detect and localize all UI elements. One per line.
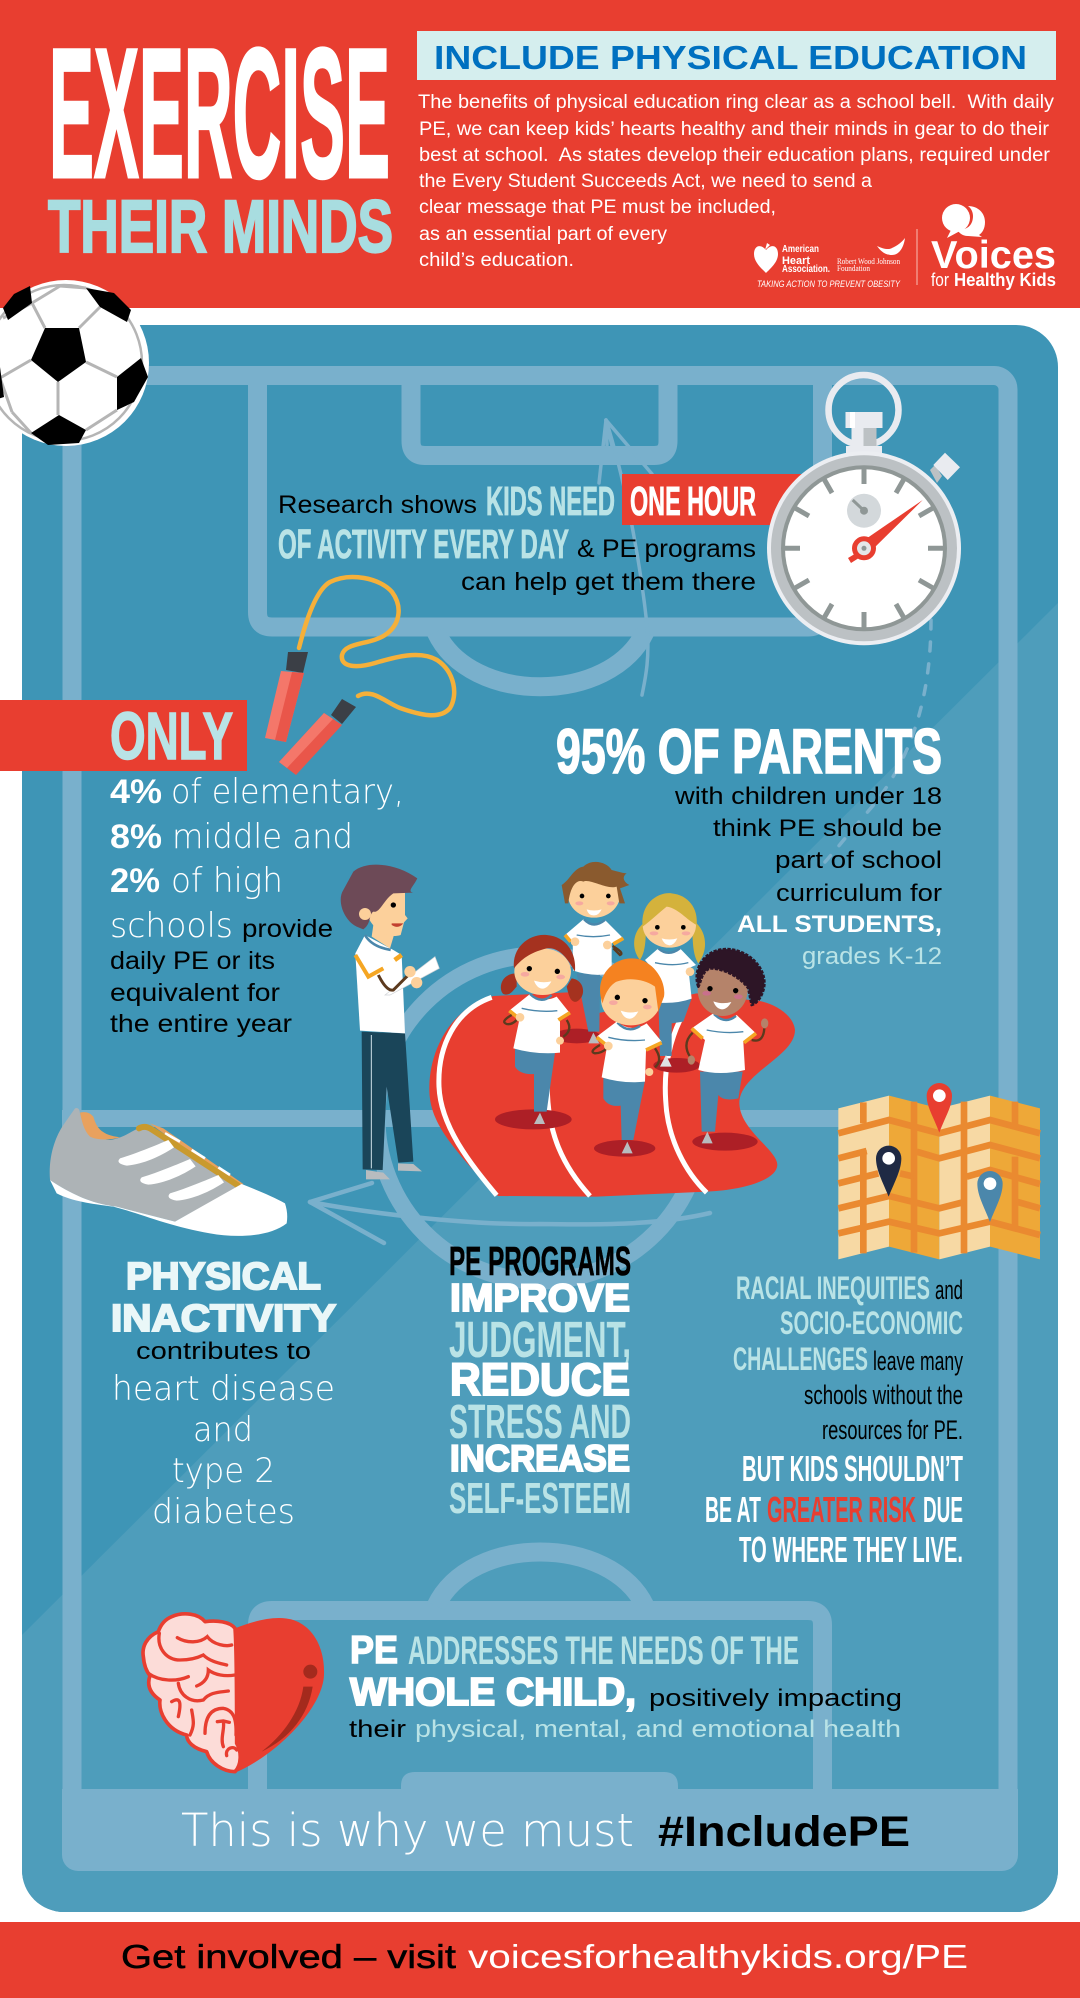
icon: brain and heart bbox=[143, 1614, 324, 1773]
text: racial inequities: SOCIO-ECONOMIC bbox=[780, 1305, 963, 1341]
callout: one hour of activity: Research shows bbox=[278, 491, 477, 519]
logo: American Heart Association: Association. bbox=[782, 264, 830, 275]
text: 95% of parents: think PE should be bbox=[713, 815, 942, 842]
dotted path from stopwatch bbox=[825, 620, 931, 862]
text: daily PE statistics: provide bbox=[242, 915, 333, 943]
arrow: play arrow up bbox=[599, 420, 652, 695]
text: racial inequities: and bbox=[935, 1275, 963, 1305]
text: racial inequities: resources for PE. bbox=[822, 1415, 963, 1445]
text: PE programs benefits: SELF-ESTEEM bbox=[449, 1474, 631, 1523]
heading box: include physical education: INCLUDE PHYSICAL EDUCATION bbox=[434, 39, 1027, 76]
callout bar: one hour bbox=[622, 474, 802, 525]
call to action: include PE hashtag: This is why we must bbox=[181, 1804, 634, 1857]
intro paragraph bbox=[418, 92, 1055, 271]
intro paragraph: best at school. As states develop their education plans, required under bbox=[419, 145, 1051, 166]
icon: jump rope bbox=[265, 577, 454, 775]
text: racial inequities: schools without the bbox=[804, 1380, 963, 1410]
text: physical inactivity bbox=[111, 1256, 336, 1532]
text: racial inequities: GREATER RISK bbox=[767, 1489, 916, 1530]
logo: Robert Wood Johnson Foundation: Robert Wood Johnson bbox=[837, 257, 900, 266]
teacher bbox=[341, 865, 439, 1179]
text: daily PE statistics: of elementary, bbox=[171, 772, 404, 812]
text: daily PE statistics: of high bbox=[171, 861, 283, 901]
text: 95% of parents: grades K-12 bbox=[802, 943, 942, 970]
text: physical inactivity: PHYSICAL bbox=[126, 1256, 321, 1298]
panel: header banner bbox=[0, 0, 1080, 308]
logo: American Heart Association: TAKING ACTION TO PREVENT OBESITY bbox=[757, 279, 901, 289]
text: 95% of parents: with children under 18 bbox=[674, 783, 942, 810]
footer banner: voicesforhealthykids.org/PE bbox=[468, 1938, 968, 1975]
text: physical inactivity: diabetes bbox=[152, 1492, 295, 1532]
text: physical inactivity: type 2 bbox=[172, 1451, 275, 1491]
icon: stopwatch bbox=[767, 375, 961, 645]
illustration: teacher and children on track bbox=[341, 862, 795, 1197]
running track bbox=[429, 992, 795, 1197]
panel: header banner: EXERCISE bbox=[49, 11, 390, 217]
text: whole child: physical, mental, and emotional health bbox=[415, 1716, 901, 1743]
call to action: include PE hashtag: #IncludePE bbox=[658, 1808, 910, 1856]
logo: Voices for Healthy Kids: Voices bbox=[931, 234, 1056, 277]
intro paragraph: the Every Student Succeeds Act, we need to send a bbox=[419, 171, 872, 192]
text: daily PE statistics bbox=[110, 772, 404, 1038]
logo: American Heart Association: American bbox=[782, 244, 819, 255]
intro paragraph: The benefits of physical education ring clear as a school bell. With daily bbox=[418, 92, 1055, 113]
logo: Voices for Healthy Kids: Healthy Kids bbox=[954, 270, 1056, 290]
text: 95% of parents bbox=[556, 717, 942, 970]
callout: one hour of activity: OF ACTIVITY EVERY DAY bbox=[278, 521, 569, 567]
text: PE programs benefits: PE PROGRAMS bbox=[449, 1238, 631, 1284]
text: racial inequities: leave many bbox=[873, 1346, 963, 1376]
text: 95% of parents: part of school bbox=[775, 847, 942, 874]
text: whole child bbox=[349, 1629, 902, 1743]
text: 95% of parents: curriculum for bbox=[776, 880, 942, 907]
icon: folded map with pins bbox=[838, 1083, 1040, 1259]
text: daily PE statistics: 8% bbox=[110, 818, 162, 856]
footer banner bbox=[0, 1922, 1080, 1998]
text: racial inequities: BE AT bbox=[705, 1489, 761, 1530]
callout: only bbox=[0, 699, 247, 774]
callout: one hour of activity: & PE programs bbox=[577, 535, 756, 563]
text: PE programs benefits: IMPROVE bbox=[450, 1277, 630, 1320]
icon: soccer ball bbox=[0, 280, 149, 446]
text: physical inactivity: INACTIVITY bbox=[111, 1298, 336, 1340]
text: PE programs benefits: REDUCE bbox=[450, 1354, 630, 1405]
text: racial inequities: RACIAL INEQUITIES bbox=[736, 1270, 930, 1306]
text: whole child: their bbox=[349, 1716, 406, 1743]
intro paragraph: PE, we can keep kids’ hearts healthy and their minds in gear to do their bbox=[419, 119, 1050, 140]
child: boy with curly dark hair bbox=[686, 949, 768, 1143]
child: girl with red hair bbox=[501, 935, 583, 1124]
child: boy with brown hair bbox=[562, 862, 629, 1043]
intro paragraph: as an essential part of every bbox=[419, 224, 668, 245]
text: racial inequities: DUE bbox=[923, 1489, 963, 1530]
text: PE programs benefits: JUDGMENT, bbox=[449, 1311, 631, 1368]
heading box: include physical education bbox=[417, 31, 1056, 80]
logo: Voices for Healthy Kids: for bbox=[931, 270, 949, 290]
subtitle: Their Minds: THEIR MINDS bbox=[48, 185, 393, 268]
callout: one hour of activity bbox=[278, 478, 756, 596]
text: PE programs benefits bbox=[449, 1238, 631, 1523]
text: daily PE statistics: middle and bbox=[172, 817, 353, 857]
text: whole child: positively impacting bbox=[649, 1685, 902, 1712]
text: daily PE statistics: the entire year bbox=[110, 1010, 292, 1038]
text: daily PE statistics: 2% bbox=[110, 862, 160, 900]
logo: Robert Wood Johnson Foundation bbox=[837, 238, 905, 273]
text: daily PE statistics: 4% bbox=[110, 773, 162, 811]
logo: American Heart Association: Heart bbox=[782, 255, 810, 267]
text: PE programs benefits: INCREASE bbox=[450, 1438, 630, 1479]
text: racial inequities: CHALLENGES bbox=[733, 1341, 868, 1377]
arrow: play arrow left bbox=[310, 1183, 710, 1243]
callout: only: ONLY bbox=[110, 699, 233, 774]
callout: one hour of activity: can help get them there bbox=[461, 568, 756, 596]
text: physical inactivity: heart disease bbox=[112, 1369, 335, 1409]
child: girl with blonde hair bbox=[634, 893, 705, 1067]
call to action: include PE hashtag bbox=[181, 1804, 910, 1857]
child: boy with orange hair bbox=[593, 958, 664, 1153]
logo: Voices for Healthy Kids bbox=[931, 204, 1056, 290]
text: whole child: PE bbox=[350, 1629, 398, 1672]
panel: soccer pitch background bbox=[22, 325, 1058, 1912]
intro paragraph: clear message that PE must be included, bbox=[419, 197, 776, 218]
text: daily PE statistics: equivalent for bbox=[110, 979, 280, 1007]
text: physical inactivity: contributes to bbox=[136, 1338, 311, 1365]
text: 95% of parents: ALL STUDENTS, bbox=[737, 911, 942, 938]
text: racial inequities bbox=[705, 1270, 963, 1570]
callout: one hour of activity: KIDS NEED bbox=[486, 478, 615, 524]
text: physical inactivity: and bbox=[193, 1410, 253, 1450]
text: daily PE statistics: schools bbox=[110, 906, 233, 946]
text: daily PE statistics: daily PE or its bbox=[110, 947, 275, 975]
text: whole child: ADDRESSES THE NEEDS OF THE bbox=[408, 1629, 799, 1673]
icon: sneaker bbox=[50, 1108, 287, 1236]
text: whole child: WHOLE CHILD, bbox=[350, 1671, 636, 1714]
logo: Robert Wood Johnson Foundation: Foundation bbox=[837, 264, 870, 273]
callout: one hour of activity: ONE HOUR bbox=[630, 478, 756, 524]
intro paragraph: child’s education. bbox=[419, 250, 574, 271]
footer banner: Get involved – visit bbox=[121, 1938, 456, 1975]
logo: American Heart Association bbox=[754, 243, 901, 289]
text: PE programs benefits: STRESS AND bbox=[449, 1396, 631, 1449]
